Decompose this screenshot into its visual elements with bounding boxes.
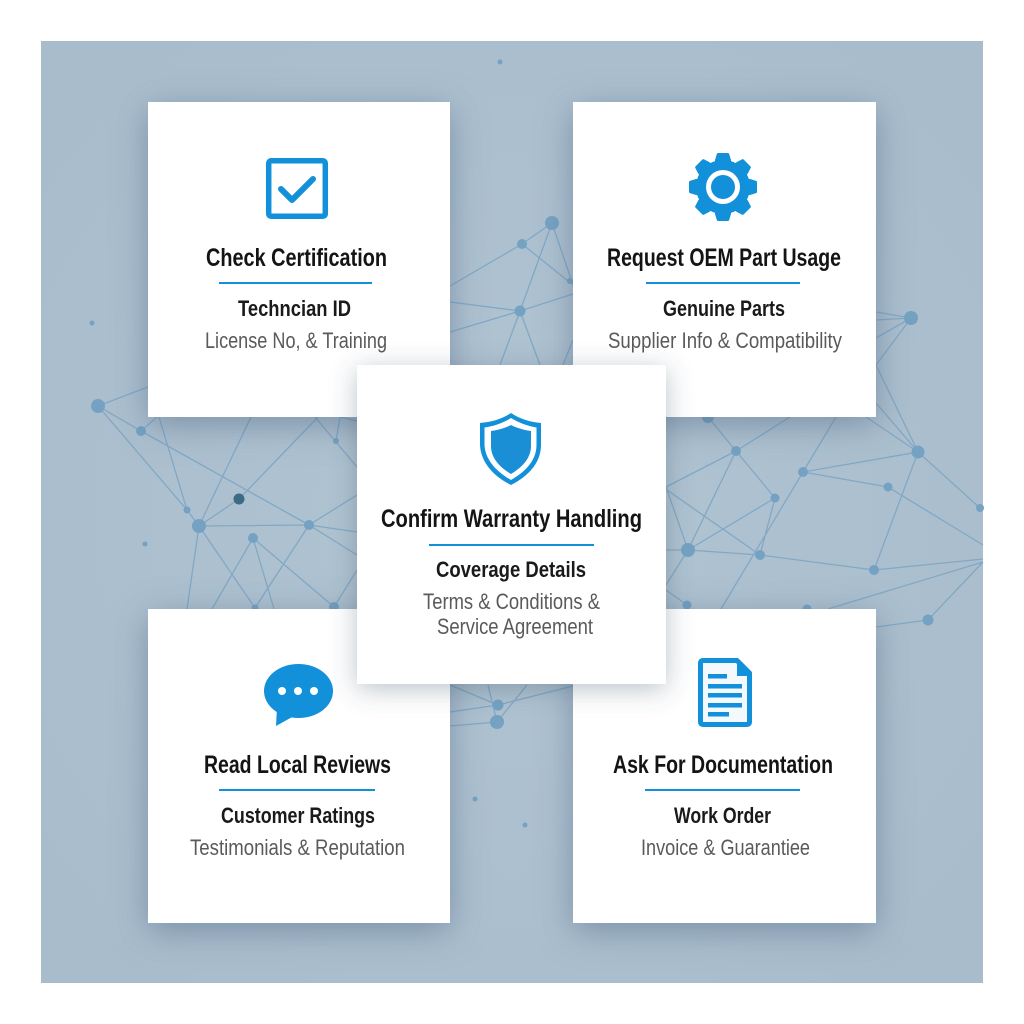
icon: document — [700, 658, 752, 724]
icon: checkbox — [269, 161, 325, 216]
subheading: Coverage Details — [436, 557, 586, 582]
description: Service Agreement — [437, 614, 593, 639]
icon: gear — [689, 153, 757, 221]
heading: Read Local Reviews — [204, 751, 391, 779]
subheading: Customer Ratings — [221, 803, 375, 828]
description: Invoice & Guarantiee — [641, 835, 810, 860]
description: Supplier Info & Compatibility — [608, 328, 842, 353]
subheading: Techncian ID — [238, 296, 351, 321]
heading: Ask For Documentation — [613, 751, 833, 779]
description: License No, & Training — [205, 328, 387, 353]
subheading: Work Order — [674, 803, 771, 828]
icon: speech bubble — [264, 664, 333, 726]
description: Testimonials & Reputation — [190, 835, 405, 860]
subheading: Genuine Parts — [663, 296, 785, 321]
panel: read local reviews — [148, 609, 450, 923]
heading: Request OEM Part Usage — [607, 244, 841, 272]
network graph background — [90, 60, 984, 828]
panel: ask for documentation — [573, 609, 876, 923]
icon: shield — [480, 413, 541, 485]
heading: Check Certification — [206, 244, 387, 272]
heading: Confirm Warranty Handling — [381, 505, 642, 533]
panel: request OEM part usage — [573, 102, 876, 417]
panel: confirm warranty handling — [357, 365, 666, 684]
description: Terms & Conditions & — [423, 589, 600, 614]
panel: check certification — [148, 102, 450, 417]
description — [423, 589, 600, 639]
